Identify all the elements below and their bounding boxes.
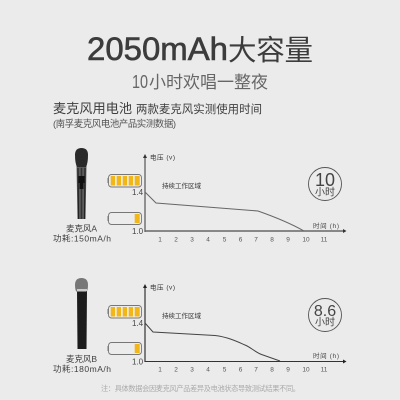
chart: microphone A voltage over time: 11 (321, 236, 328, 244)
subtitle: 小时欢唱一整夜 (149, 73, 268, 92)
chart: microphone B voltage over time: 9 (286, 366, 290, 374)
chart: microphone B voltage over time: 6 (239, 366, 243, 374)
icon: microphone A (75, 148, 88, 219)
icon: low battery A (108, 212, 142, 224)
chart: microphone A voltage over time: 持续工作区域 (162, 181, 202, 190)
chart: microphone A voltage over time: 6 (239, 236, 243, 244)
chart: microphone B voltage over time: 4 (206, 366, 210, 374)
chart: microphone A voltage over time: 2 (174, 236, 178, 244)
chart: microphone B voltage over time: 8 (270, 366, 274, 374)
chart: microphone B voltage over time: 1.0 (132, 358, 144, 366)
chart: microphone B voltage over time: 10 (302, 366, 310, 374)
chart: microphone B voltage over time: 1.4 (132, 319, 144, 328)
callout: 10 hours: 小时 (315, 186, 335, 198)
chart: microphone B voltage over time: 1 (158, 366, 162, 374)
chart: microphone B voltage over time: 3 (190, 366, 194, 374)
microphone A label (53, 224, 111, 244)
chart: microphone A voltage over time: 9 (286, 236, 290, 244)
callout: 8.6 hours: 小时 (315, 316, 335, 328)
microphone B label: 麦克风B (66, 354, 97, 364)
chart: microphone A voltage over time: 4 (206, 236, 210, 244)
callout: 10 hours: 10 (315, 170, 335, 190)
subtitle: 10 (132, 71, 148, 92)
chart: microphone A voltage over time: 3 (190, 236, 194, 244)
microphone B label: 功耗:180mA/h (53, 364, 111, 374)
chart: microphone B voltage over time: 时间 (h) (313, 351, 339, 360)
chart: microphone A voltage over time: 1.4 (132, 188, 144, 197)
section heading: (南孚麦克风电池产品实测数据) (53, 118, 176, 130)
title: 大容量 (228, 35, 313, 67)
icon: low battery B (108, 342, 142, 354)
chart: microphone B voltage over time: 5 (223, 366, 227, 374)
callout: 10 hours (308, 168, 342, 200)
chart: microphone B voltage over time: 7 (254, 366, 258, 374)
icon: full battery B (108, 306, 142, 318)
chart: microphone B voltage over time: 电压 (v) (150, 282, 175, 292)
section heading: 两款麦克风实测使用时间 (136, 102, 262, 116)
section heading (53, 101, 262, 130)
chart: microphone B voltage over time: 2 (174, 366, 178, 374)
chart: microphone B voltage over time (132, 282, 346, 374)
footnote: 注：具体数据会因麦克风产品差异及电池状态导致测试结果不同。 (101, 384, 300, 393)
chart: microphone A voltage over time (132, 152, 346, 244)
chart: microphone A voltage over time: 7 (254, 236, 258, 244)
chart: microphone A voltage over time: 时间 (h) (313, 221, 339, 230)
chart: microphone A voltage over time: 8 (270, 236, 274, 244)
chart: microphone A voltage over time: 5 (223, 236, 227, 244)
callout: 8.6 hours: 8.6 (314, 303, 336, 320)
icon: full battery A (108, 174, 142, 187)
chart: microphone A voltage over time: 1.0 (132, 227, 144, 236)
microphone A label: 麦克风A (66, 224, 97, 234)
section heading: 麦克风用电池 (53, 101, 132, 116)
title: 2050mAh (87, 31, 228, 67)
icon: microphone B (75, 278, 88, 349)
chart: microphone A voltage over time: 10 (302, 236, 310, 244)
chart: microphone B voltage over time: 持续工作区域 (162, 311, 202, 320)
chart: microphone A voltage over time: 电压 (v) (150, 152, 175, 162)
microphone B label (53, 354, 111, 374)
chart: microphone B voltage over time: 11 (321, 366, 328, 374)
chart: microphone A voltage over time: 1 (158, 236, 162, 244)
callout: 8.6 hours (308, 298, 342, 332)
microphone A label: 功耗:150mA/h (53, 234, 111, 244)
title (87, 31, 313, 67)
